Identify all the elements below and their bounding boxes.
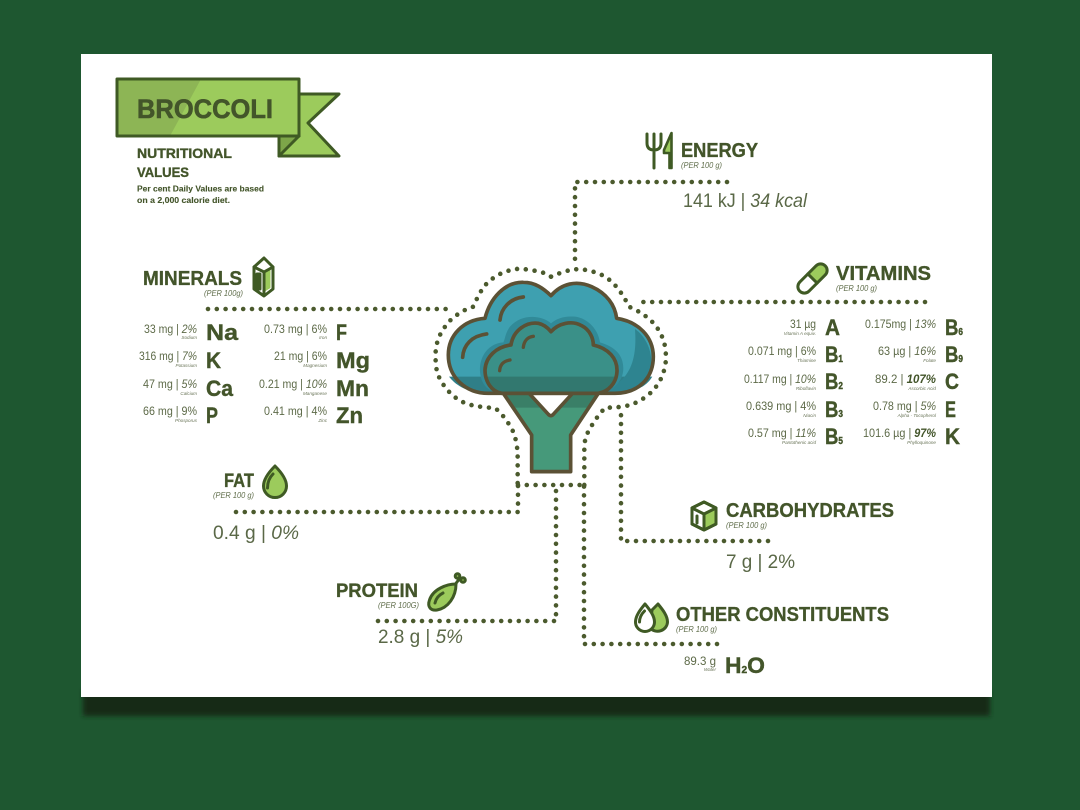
icon: drop xyxy=(264,466,286,498)
panel: protein xyxy=(336,574,465,648)
broccoli illustration xyxy=(448,282,653,472)
large crown xyxy=(448,282,653,393)
heading: CARBOHYDRATES xyxy=(726,500,894,522)
card shadow xyxy=(83,690,990,716)
vitamin table: B2 xyxy=(825,369,843,394)
panel: vitamins xyxy=(744,261,963,449)
subtitle: VALUES xyxy=(137,165,189,180)
vitamin table: Riboflavin xyxy=(796,386,816,391)
heading: ENERGY xyxy=(681,140,759,162)
water value: 89.3 g xyxy=(684,656,716,668)
white card xyxy=(81,54,992,697)
vitamin table xyxy=(744,315,963,449)
mineral table: Ca xyxy=(206,376,233,401)
mineral table: Phosporus xyxy=(175,418,198,423)
mineral table: Potassium xyxy=(176,363,197,368)
mineral table: 21 mg | 6% xyxy=(274,351,327,363)
title: BROCCOLI xyxy=(137,94,273,124)
mineral table: Manganese xyxy=(303,391,327,396)
vitamin table: Vitamin A equiv. xyxy=(784,331,816,336)
icon: cube xyxy=(692,502,716,530)
vitamin table: Ascorbic Acid xyxy=(907,386,936,391)
mineral table: 47 mg | 5% xyxy=(143,379,197,391)
per unit: (PER 100 g) xyxy=(213,491,254,500)
vitamin table: Niacin xyxy=(803,413,816,418)
heading: OTHER CONSTITUENTS xyxy=(676,604,889,626)
value: 0.4 g | 0% xyxy=(213,523,299,544)
heading: FAT xyxy=(224,471,254,492)
vitamin table: 101.6 µg | 97% xyxy=(863,428,936,440)
icon: crystal xyxy=(254,258,273,296)
vitamin table: K xyxy=(945,424,961,449)
per unit: (PER 100 g) xyxy=(676,625,717,634)
vitamin table: Pantothenic acid xyxy=(782,440,816,445)
mineral table: 0.73 mg | 6% xyxy=(264,324,327,336)
mineral table: Zinc xyxy=(317,418,328,423)
vitamin table: B3 xyxy=(825,397,843,422)
panel: other constituents xyxy=(636,604,889,678)
mineral table: Zn xyxy=(336,403,363,428)
vitamin table: 0.57 mg | 11% xyxy=(748,428,816,440)
vitamin table: 0.071 mg | 6% xyxy=(748,346,816,358)
icon: drumstick xyxy=(429,574,465,610)
mineral table: Na xyxy=(206,320,239,345)
note xyxy=(137,184,264,205)
panel: minerals xyxy=(139,258,370,428)
vitamin table: Phylloquinone xyxy=(907,440,936,445)
panel: other constituents: Water xyxy=(704,667,716,672)
icon: fork and knife xyxy=(647,133,672,168)
vitamin table: 63 µg | 16% xyxy=(878,346,936,358)
value: 141 kJ | 34 kcal xyxy=(683,191,808,212)
mineral table: Calcium xyxy=(180,391,197,396)
vitamin table: 31 µg xyxy=(790,319,816,331)
value: 7 g | 2% xyxy=(726,552,795,573)
mineral table: 66 mg | 9% xyxy=(143,406,197,418)
vitamin table: Thiamine xyxy=(797,358,816,363)
mineral table: K xyxy=(206,348,222,373)
vitamin table: 0.117 mg | 10% xyxy=(744,374,816,386)
vitamin table: 89.2 | 107% xyxy=(875,374,936,386)
vitamin table: A xyxy=(825,315,840,340)
mineral table: 316 mg | 7% xyxy=(139,351,197,363)
vitamin table: B1 xyxy=(825,342,843,367)
heading: VITAMINS xyxy=(836,263,931,285)
mineral table xyxy=(139,320,370,428)
mineral table: Mn xyxy=(336,376,369,401)
mineral table: Iron xyxy=(319,335,327,340)
mineral table: Sodium xyxy=(181,335,197,340)
icon: pill xyxy=(795,261,830,296)
vitamin table: B9 xyxy=(945,342,963,367)
value: 2.8 g | 5% xyxy=(378,627,463,648)
note: Per cent Daily Values are based xyxy=(137,184,264,194)
mineral table: F xyxy=(336,320,347,345)
per unit: (PER 100 g) xyxy=(681,161,722,170)
panel: fat xyxy=(213,466,299,544)
vitamin table: Folate xyxy=(923,358,936,363)
per unit: (PER 100 g) xyxy=(836,284,877,293)
panel: energy xyxy=(647,133,808,212)
vitamin table: 0.78 mg | 5% xyxy=(873,401,936,413)
icon: water drops xyxy=(636,604,668,632)
water symbol: H2O xyxy=(725,653,765,678)
vitamin table: Alpha - Tocopherol xyxy=(897,413,937,418)
vitamin table: B6 xyxy=(945,315,963,340)
dotted connector lines xyxy=(208,182,925,644)
vitamin table: B5 xyxy=(825,424,843,449)
mineral table: 0.21 mg | 10% xyxy=(259,379,327,391)
note: on a 2,000 calorie diet. xyxy=(137,195,230,205)
vitamin table: C xyxy=(945,369,959,394)
mineral table: 33 mg | 2% xyxy=(144,324,197,336)
mineral table: 0.41 mg | 4% xyxy=(264,406,327,418)
heading: MINERALS xyxy=(143,268,242,290)
subtitle xyxy=(137,146,232,180)
per unit: (PER 100G) xyxy=(378,601,419,610)
stem xyxy=(503,393,598,472)
title ribbon xyxy=(117,79,339,156)
panel: carbohydrates xyxy=(692,500,894,573)
mineral table: P xyxy=(206,403,218,428)
heading: PROTEIN xyxy=(336,581,418,602)
mineral table: Magnesium xyxy=(303,363,327,368)
per unit: (PER 100 g) xyxy=(726,521,767,530)
vitamin table: 0.639 mg | 4% xyxy=(746,401,816,413)
vitamin table: E xyxy=(945,397,956,422)
mineral table: Mg xyxy=(336,348,370,373)
small crown xyxy=(480,316,623,393)
vitamin table: 0.175mg | 13% xyxy=(865,319,936,331)
subtitle: NUTRITIONAL xyxy=(137,146,232,161)
per unit: (PER 100g) xyxy=(204,289,243,298)
